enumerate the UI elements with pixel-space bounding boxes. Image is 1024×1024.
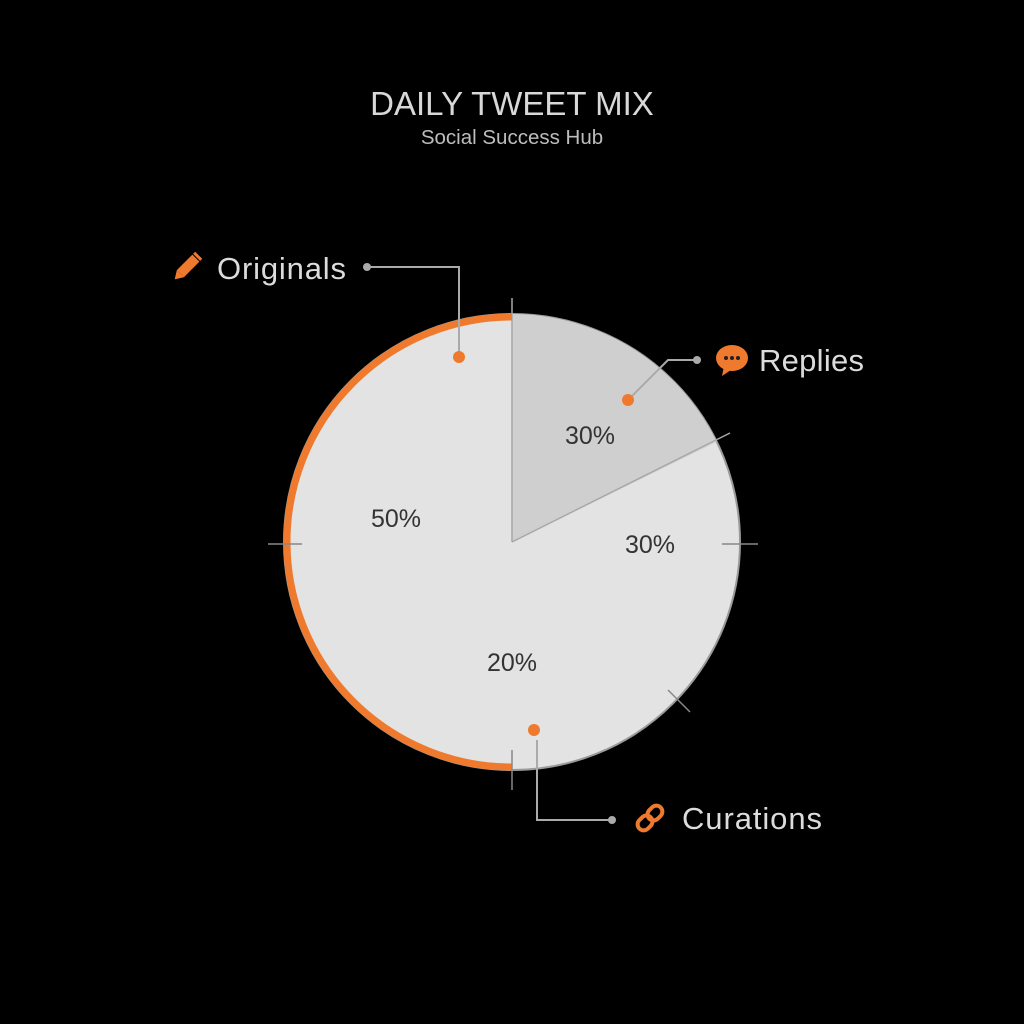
callout: Originals — [171, 251, 465, 363]
pie chart — [268, 298, 758, 790]
callout: Originals: Originals — [217, 251, 346, 286]
subtitle: Social Success Hub — [421, 126, 603, 149]
callout: Replies — [622, 343, 864, 406]
pie chart: 30% — [625, 531, 675, 559]
callout: Curations: Curations — [682, 801, 822, 836]
pie chart: 30% — [565, 422, 615, 450]
pie chart: 50% — [371, 505, 421, 533]
callout: Curations — [528, 724, 822, 836]
title: DAILY TWEET MIX — [370, 85, 654, 122]
callout: Replies: Replies — [759, 343, 864, 378]
pie chart: 20% — [487, 649, 537, 677]
